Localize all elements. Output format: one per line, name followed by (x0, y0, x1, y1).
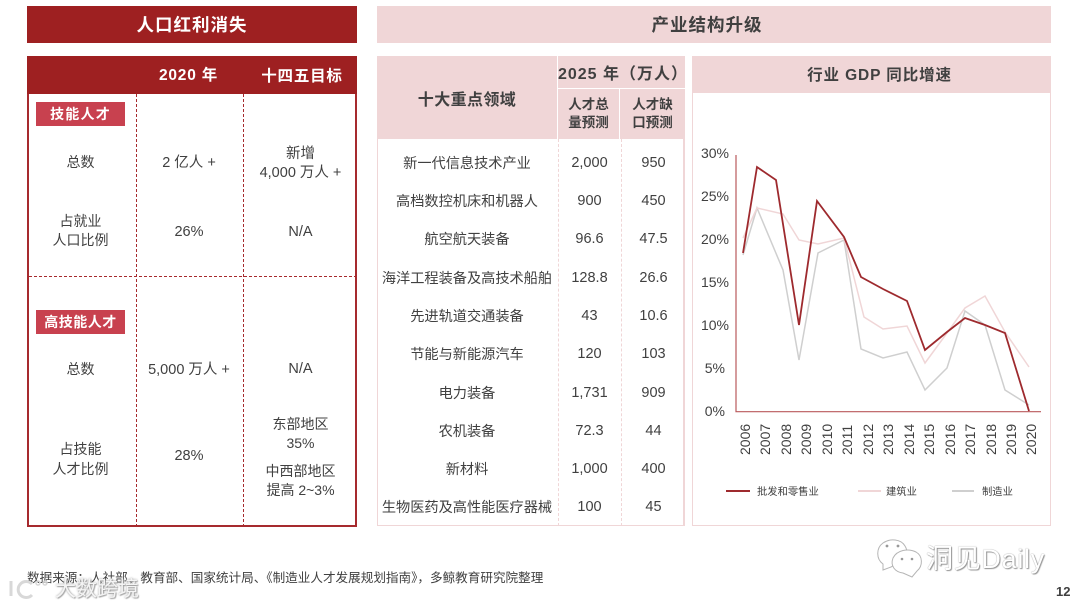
value: 28%: 28% (174, 448, 204, 464)
y axis labels: 30% (701, 145, 729, 161)
y axis labels: 15% (701, 274, 729, 290)
y axis labels: 5% (705, 360, 725, 376)
row: 新材料 (446, 461, 666, 478)
header: 人才缺口预测: 人才缺 (632, 97, 673, 112)
row: 海洋工程装备及高技术船舶: 26.6 (639, 270, 668, 286)
x axis year labels: 2010 (819, 424, 835, 455)
header: 十大重点领域 (377, 56, 557, 139)
value: 东部地区 35% (272, 416, 328, 451)
row: 新材料: 1,000 (571, 461, 608, 477)
row: 新材料: 400 (641, 461, 666, 477)
y axis labels: 0% (705, 403, 725, 419)
panel: GDP growth chart (692, 56, 1051, 526)
row: 先进轨道交通装备: 10.6 (639, 308, 668, 324)
value: 26%: 26% (174, 224, 204, 240)
x axis year labels: 2011 (839, 425, 855, 455)
x axis year labels: 2019 (1003, 424, 1019, 455)
row: 新材料: 新材料 (446, 462, 488, 478)
value: 2 亿人 +: 2 亿人 + (162, 154, 216, 170)
row: 海洋工程装备及高技术船舶: 海洋工程装备及高技术船舶 (382, 271, 552, 287)
header: 十四五目标: 十四五目标 (261, 68, 343, 84)
x axis year labels: 2006 (737, 424, 753, 455)
chart heading: 行业 GDP 同比增速: 行业 GDP 同比增速 (807, 67, 952, 84)
y axis labels: 25% (701, 188, 729, 204)
row: 高档数控机床和机器人: 900 (577, 193, 602, 209)
page number: 12 (1056, 584, 1070, 599)
source note: 数据来源：人社部、教育部、国家统计局、《制造业人才发展规划指南》，多鲸教育研究院整理 (27, 571, 543, 585)
series: 建筑业 (743, 208, 1029, 367)
header: 十大重点领域: 十大重点领域 (418, 92, 516, 109)
value: 东部地区 35%: 东部地区 (272, 416, 328, 432)
row: 先进轨道交通装备 (410, 308, 668, 325)
label: 占技能人才比例: 人才比例 (52, 461, 108, 477)
row: 节能与新能源汽车 (410, 346, 666, 363)
value: 5,000 万人 +: 5,000 万人 + (148, 362, 230, 378)
header: 2025 年（万人）: 2025 年（万人） (558, 66, 688, 83)
x axis year labels: 2013 (880, 424, 896, 455)
header: 人才总量预测: 量预测 (568, 115, 609, 130)
legend (726, 485, 1013, 498)
row: 新一代信息技术产业: 2,000 (571, 155, 608, 171)
header: 人才缺口预测 (620, 89, 685, 139)
value: 中西部地区提高 2~3%: 提高 2~3% (266, 482, 335, 498)
x axis year labels: 2012 (860, 424, 876, 455)
x axis year labels: 2015 (921, 424, 937, 455)
icon: chat bubbles (877, 539, 922, 578)
row: 航空航天装备: 96.6 (575, 231, 604, 247)
value: 中西部地区提高 2~3% (266, 463, 336, 498)
badge: 高技能人才 (36, 310, 125, 334)
row: 节能与新能源汽车: 节能与新能源汽车 (410, 347, 524, 363)
row: 电力装备 (439, 385, 666, 402)
title bar: 产业结构升级 (377, 6, 1051, 43)
badge: 技能人才 (36, 102, 125, 126)
row: 高档数控机床和机器人: 高档数控机床和机器人 (396, 194, 538, 210)
value: 东部地区 35%: 35% (286, 435, 315, 451)
header: 人才总量预测 (558, 89, 619, 139)
x axis year labels: 2009 (798, 424, 814, 455)
label: 占就业人口比例: 占就业 (60, 213, 102, 229)
x axis year labels: 2020 (1023, 424, 1039, 455)
x axis year labels: 2018 (983, 424, 999, 455)
legend: 制造业 (982, 485, 1013, 498)
row: 航空航天装备 (424, 231, 668, 248)
x axis year labels: 2007 (757, 424, 773, 455)
row: 航空航天装备: 航空航天装备 (424, 232, 510, 248)
row: 先进轨道交通装备: 43 (581, 308, 598, 324)
watermark text: 洞见Daily (926, 544, 1045, 574)
value: N/A: N/A (288, 360, 313, 376)
row: 农机装备: 72.3 (575, 423, 604, 439)
label: 占技能人才比例 (52, 441, 108, 477)
x axis year labels: 2014 (901, 424, 917, 455)
chart heading: 行业 GDP 同比增速 (692, 56, 1051, 93)
header: 人才总量预测: 人才总 (568, 97, 609, 112)
title bar: 人口红利消失 (27, 6, 357, 43)
x axis year labels: 2017 (962, 424, 978, 455)
row: 农机装备: 44 (645, 423, 662, 439)
label: 占就业人口比例 (52, 213, 108, 248)
panel: ten key fields table (377, 56, 688, 526)
badge: 技能人才: 技能人才 (50, 106, 111, 122)
row: 生物医药及高性能医疗器械: 生物医药及高性能医疗器械 (382, 500, 552, 516)
row: 农机装备: 农机装备 (439, 424, 495, 440)
row: 海洋工程装备及高技术船舶: 128.8 (571, 270, 608, 286)
title bar: 人口红利消失: 人口红利消失 (136, 15, 248, 35)
row: 电力装备: 电力装备 (439, 386, 495, 402)
table header row (27, 56, 357, 94)
row: 新一代信息技术产业: 新一代信息技术产业 (403, 156, 531, 172)
series: 制造业 (743, 208, 1029, 405)
badge: 高技能人才: 高技能人才 (44, 314, 117, 330)
row: 节能与新能源汽车: 103 (641, 346, 666, 362)
label: 占技能人才比例: 占技能 (60, 441, 102, 457)
header: 2020 年: 2020 年 (159, 67, 218, 84)
header: 人才缺口预测: 口预测 (632, 115, 673, 130)
watermark: 大数跨境 (10, 577, 140, 601)
panel: talent table (27, 56, 357, 527)
x axis year labels (737, 424, 1039, 455)
x axis year labels: 2008 (778, 424, 794, 455)
row: 海洋工程装备及高技术船舶 (382, 270, 668, 287)
watermark text: 大数跨境 (55, 578, 139, 601)
row: 新一代信息技术产业: 950 (641, 155, 666, 171)
x axis year labels: 2016 (942, 424, 958, 455)
legend: 建筑业 (886, 485, 917, 498)
label: 总数: 总数 (66, 360, 94, 376)
value: 中西部地区提高 2~3%: 中西部地区 (266, 463, 336, 479)
row: 生物医药及高性能医疗器械: 45 (645, 499, 662, 515)
series: 批发和零售业 (743, 167, 1029, 411)
y axis labels (701, 145, 729, 419)
legend: 批发和零售业 (757, 485, 819, 498)
value: 新增 4,000 万人 +: 新增 (286, 146, 315, 162)
title bar: 产业结构升级: 产业结构升级 (652, 15, 762, 35)
header: 2025 年（万人） (558, 56, 685, 88)
row: 电力装备: 909 (641, 385, 666, 401)
row: 先进轨道交通装备: 先进轨道交通装备 (410, 309, 524, 325)
row: 高档数控机床和机器人: 450 (641, 193, 666, 209)
y axis labels: 20% (701, 231, 729, 247)
row: 高档数控机床和机器人 (396, 193, 666, 210)
row: 生物医药及高性能医疗器械: 100 (577, 499, 602, 515)
value: 新增 4,000 万人 +: 4,000 万人 + (260, 165, 341, 181)
y axis labels: 10% (701, 317, 729, 333)
row: 新一代信息技术产业 (403, 155, 666, 172)
value: N/A: N/A (288, 224, 313, 240)
row: 电力装备: 1,731 (571, 385, 608, 401)
line chart (701, 145, 1041, 498)
row: 生物医药及高性能医疗器械 (382, 499, 662, 516)
row: 农机装备 (439, 423, 662, 440)
row: 节能与新能源汽车: 120 (577, 346, 602, 362)
label: 总数: 总数 (66, 154, 94, 170)
axes (736, 155, 1041, 412)
icon: watermark logo (10, 580, 48, 599)
label: 占就业人口比例: 人口比例 (52, 232, 108, 248)
row: 航空航天装备: 47.5 (639, 231, 668, 247)
watermark: 洞见Daily (877, 539, 1046, 578)
value: 新增 4,000 万人 + (260, 145, 341, 181)
